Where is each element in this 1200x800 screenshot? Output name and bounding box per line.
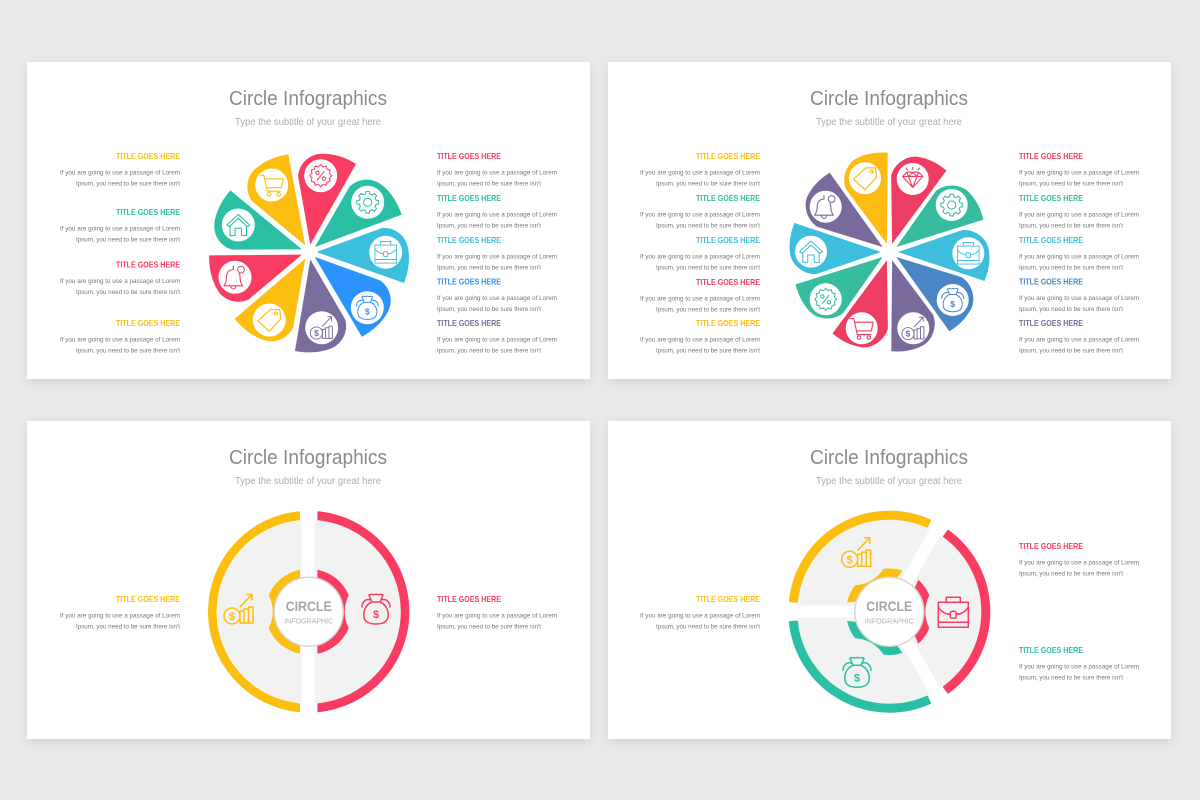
left text 1: TITLE GOES HERE	[116, 152, 180, 161]
right text 5	[1019, 319, 1139, 354]
left text 4	[60, 319, 180, 354]
right text 3	[1019, 236, 1139, 272]
left text: TITLE GOES HERE	[696, 595, 760, 604]
top-left segment	[769, 485, 956, 646]
left text 1: Ipsum, you need to be sure there isn't	[656, 180, 760, 188]
right text 3: TITLE GOES HERE	[1019, 236, 1083, 245]
left text: If you are going to use a passage of Lorem	[60, 612, 180, 620]
panel: nine-petal top left	[27, 62, 590, 379]
right text 3: Ipsum, you need to be sure there isn't	[437, 264, 541, 272]
left text 1: If you are going to use a passage of Lorem	[60, 170, 180, 176]
right text: Ipsum, you need to be sure there isn't	[437, 624, 541, 630]
icon: growth chart: $	[906, 329, 911, 339]
right segment	[896, 531, 989, 693]
left text 2: TITLE GOES HERE	[116, 208, 180, 217]
right text 4: Ipsum, you need to be sure there isn't	[1019, 306, 1123, 313]
icon: briefcase	[369, 236, 402, 269]
right text 2: Ipsum, you need to be sure there isn't	[437, 222, 541, 230]
right text 4	[1019, 278, 1139, 313]
icon: briefcase	[952, 237, 984, 269]
left text 2	[60, 208, 180, 244]
icon: growth chart: $	[229, 611, 235, 623]
right text 4: Ipsum, you need to be sure there isn't	[437, 306, 541, 313]
right text 5: Ipsum, you need to be sure there isn't	[437, 348, 541, 354]
icon: diamond	[897, 163, 929, 195]
icon: money bag	[843, 657, 871, 687]
right text 2: Ipsum, you need to be sure there isn't	[1019, 222, 1123, 230]
left text 4: TITLE GOES HERE	[116, 319, 180, 328]
left text: If you are going to use a passage of Lorem	[640, 612, 760, 620]
bottom-left segment	[769, 577, 956, 739]
icon: growth chart	[305, 311, 338, 344]
left text 3: TITLE GOES HERE	[696, 236, 760, 245]
heading: Circle Infographics	[810, 447, 968, 469]
right half segment	[315, 512, 408, 711]
left text: Ipsum, you need to be sure there isn't	[656, 624, 760, 630]
panel: two-part circle bottom left	[27, 421, 590, 739]
left text 2: TITLE GOES HERE	[696, 194, 760, 203]
left text 4: If you are going to use a passage of Lorem	[640, 296, 760, 302]
left text 2: Ipsum, you need to be sure there isn't	[656, 222, 760, 230]
left text 2: If you are going to use a passage of Lorem	[60, 226, 180, 232]
left text 4: Ipsum, you need to be sure there isn't	[656, 306, 760, 314]
right text 2: TITLE GOES HERE	[1019, 194, 1083, 203]
right text 2	[437, 194, 557, 230]
subtitle: Type the subtitle of your great here	[235, 476, 381, 487]
right text 3: If you are going to use a passage of Lorem	[1019, 254, 1139, 260]
right text 2: If you are going to use a passage of Lorem	[437, 212, 557, 218]
right text: TITLE GOES HERE	[437, 595, 501, 604]
icon: house	[222, 208, 255, 242]
left half segment	[209, 512, 302, 711]
right text 5: If you are going to use a passage of Lorem	[437, 336, 557, 344]
right text 1: TITLE GOES HERE	[437, 152, 501, 161]
icon: growth chart	[224, 594, 253, 624]
left text 1: TITLE GOES HERE	[696, 152, 760, 161]
subtitle: Type the subtitle of your great here	[235, 117, 381, 128]
right text 3: Ipsum, you need to be sure there isn't	[1019, 264, 1123, 272]
left text 3: If you are going to use a passage of Lorem	[60, 278, 180, 285]
three-part circle chart	[769, 485, 989, 739]
left text 3: If you are going to use a passage of Lorem	[640, 254, 760, 260]
left text 3: TITLE GOES HERE	[116, 260, 180, 270]
left text 1: Ipsum, you need to be sure there isn't	[76, 180, 180, 188]
right text: If you are going to use a passage of Lorem	[437, 612, 557, 620]
left text 1	[640, 152, 760, 188]
center circle label: INFOGRAPHIC	[865, 617, 914, 626]
right text 1: If you are going to use a passage of Lorem	[437, 170, 557, 176]
icon: gear	[351, 186, 384, 219]
center circle label: CIRCLE	[866, 599, 912, 614]
right text 4: TITLE GOES HERE	[1019, 278, 1083, 286]
left text	[640, 595, 760, 630]
icon: cart	[846, 312, 878, 344]
right text 1	[1019, 152, 1139, 188]
right text 1	[437, 152, 557, 188]
right text 1: Ipsum, you need to be sure there isn't	[1019, 570, 1123, 578]
left text 4: Ipsum, you need to be sure there isn't	[76, 348, 180, 354]
right text 2: TITLE GOES HERE	[437, 194, 501, 203]
left text 1	[60, 152, 180, 188]
right text 1: TITLE GOES HERE	[1019, 542, 1083, 551]
right text 4	[437, 278, 557, 313]
right text 5	[437, 319, 557, 354]
center circle label: CIRCLE	[286, 599, 332, 614]
right text 1: If you are going to use a passage of Lorem	[1019, 560, 1139, 566]
left text: Ipsum, you need to be sure there isn't	[76, 624, 180, 630]
subtitle: Type the subtitle of your great here	[816, 476, 962, 487]
icon: money bag	[937, 284, 969, 316]
right text 2	[1019, 194, 1139, 230]
left text 4	[640, 278, 760, 314]
left text 5: Ipsum, you need to be sure there isn't	[656, 348, 760, 354]
icon: price tag	[849, 162, 881, 194]
icon: bell	[218, 261, 252, 294]
icon: percent badge	[304, 159, 337, 192]
right text 2: If you are going to use a passage of Lorem	[1019, 212, 1139, 218]
left text	[60, 595, 180, 630]
icon: money bag: $	[373, 609, 379, 621]
left text 2	[640, 194, 760, 230]
right text 2: If you are going to use a passage of Lorem	[1019, 664, 1139, 670]
left text 5: TITLE GOES HERE	[696, 319, 760, 328]
right text 3: TITLE GOES HERE	[437, 236, 501, 245]
icon: money bag: $	[365, 307, 370, 317]
center circle label: INFOGRAPHIC	[284, 617, 334, 626]
icon: growth chart	[842, 538, 871, 567]
nine petal wheel	[204, 149, 409, 356]
left text 1: If you are going to use a passage of Lorem	[640, 170, 760, 176]
subtitle: Type the subtitle of your great here	[816, 117, 962, 128]
icon: growth chart	[897, 312, 929, 344]
left text 2: Ipsum, you need to be sure there isn't	[76, 236, 180, 244]
left text 4: TITLE GOES HERE	[696, 278, 760, 287]
heading: Circle Infographics	[229, 88, 387, 110]
heading: Circle Infographics	[810, 88, 968, 110]
heading: Circle Infographics	[229, 447, 387, 469]
center circle label	[855, 577, 924, 646]
right text 3: If you are going to use a passage of Lorem	[437, 254, 557, 260]
right text 4: If you are going to use a passage of Lorem	[437, 295, 557, 302]
right text 2: Ipsum, you need to be sure there isn't	[1019, 674, 1123, 682]
right text 5: TITLE GOES HERE	[1019, 319, 1083, 328]
right text 2	[1019, 646, 1139, 682]
icon: money bag	[362, 594, 390, 624]
left text 3: Ipsum, you need to be sure there isn't	[656, 264, 760, 272]
center circle label	[274, 577, 343, 646]
right text 4: If you are going to use a passage of Lorem	[1019, 295, 1139, 302]
icon: money bag	[351, 291, 384, 324]
right text	[437, 595, 557, 630]
icon: cart	[255, 168, 288, 202]
icon: percent badge	[810, 283, 842, 315]
right text 2: TITLE GOES HERE	[1019, 646, 1083, 655]
right text 1: If you are going to use a passage of Lorem	[1019, 170, 1139, 176]
left text 4: If you are going to use a passage of Lorem	[60, 336, 180, 344]
left text 5	[640, 319, 760, 354]
icon: gear	[936, 189, 968, 221]
icon: bell	[810, 191, 842, 223]
icon: house	[795, 236, 827, 268]
right text 1: Ipsum, you need to be sure there isn't	[1019, 180, 1123, 188]
two-part circle chart	[209, 512, 408, 711]
ten petal wheel	[790, 148, 989, 356]
right text 1: TITLE GOES HERE	[1019, 152, 1083, 161]
left text 3	[60, 260, 180, 296]
right text 1: Ipsum, you need to be sure there isn't	[437, 180, 541, 188]
left text 3	[640, 236, 760, 272]
icon: money bag: $	[854, 672, 860, 684]
icon: price tag	[253, 304, 286, 336]
right text 5: If you are going to use a passage of Lorem	[1019, 336, 1139, 344]
right text 3	[437, 236, 557, 272]
panel: three-part circle bottom right	[608, 421, 1171, 739]
icon: growth chart: $	[847, 554, 853, 566]
left text: TITLE GOES HERE	[116, 595, 180, 604]
left text 5: If you are going to use a passage of Lorem	[640, 336, 760, 344]
right text 4: TITLE GOES HERE	[437, 278, 501, 286]
icon: growth chart: $	[314, 328, 319, 338]
right text 5: Ipsum, you need to be sure there isn't	[1019, 348, 1123, 354]
icon: briefcase	[938, 597, 968, 627]
icon: money bag: $	[950, 299, 955, 309]
right text 5: TITLE GOES HERE	[437, 319, 501, 328]
left text 2: If you are going to use a passage of Lorem	[640, 212, 760, 218]
left text 3: Ipsum, you need to be sure there isn't	[76, 289, 180, 296]
panel: ten-petal top right	[608, 62, 1171, 379]
right text 1	[1019, 542, 1139, 578]
